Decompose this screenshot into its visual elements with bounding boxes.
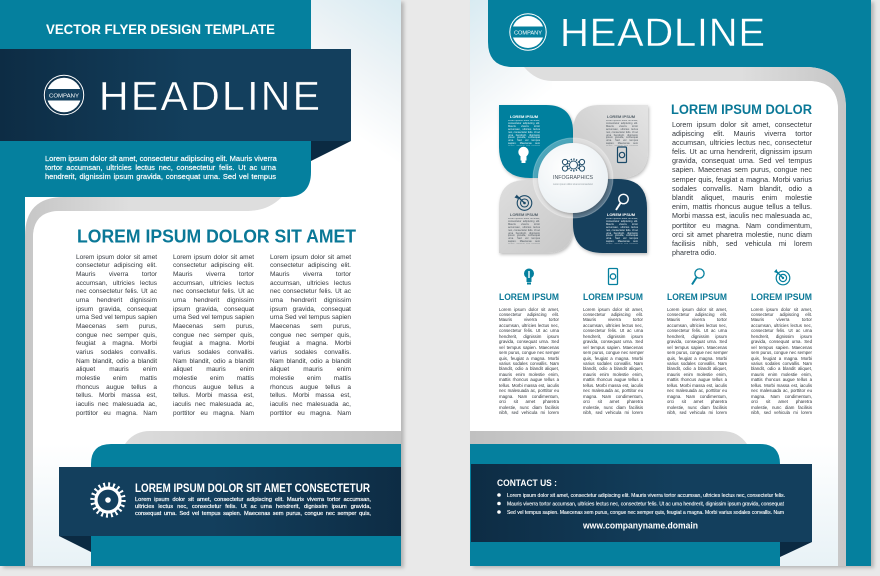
body column 1 right page: vel tempus sapien. Maecenas (499, 345, 559, 350)
body column 3 left page: Nam blandit, odio a blandit (270, 358, 351, 365)
body column 2 right page: sem purus, congue nec semper (583, 350, 644, 355)
body column 3 left page (270, 254, 351, 417)
company label right: COMPANY (514, 30, 543, 36)
petal: top-left teal (499, 105, 573, 178)
company label left: COMPANY (49, 94, 79, 100)
body column 2 right page: consectetur felis. Ut ac urna (583, 328, 643, 333)
contact line 2: Mauris viverra tortor accumsan, ultricies lectus nec, consectetur felis. Ut ac urna hendrerit, dignissim ipsum gravida, consequat (507, 502, 784, 508)
body column 4 right page: mauris enim molestie enim, (751, 372, 812, 377)
body column 1 right page: mauris enim molestie enim, (499, 372, 559, 377)
website: www.companyname.domain (582, 520, 698, 532)
bottom paragraph left: ultricies lectus nec, consectetur felis. Ut ac urna hendrerit, dignissim ipsum gravida, (135, 504, 371, 510)
body column 2 left page: Maecenas sem purus, (173, 323, 254, 330)
body column 2 right page: molestie, nunc diam facilisis (583, 405, 643, 410)
petal title bottom-left: LOREM IPSUM (510, 212, 538, 216)
left page white content area (33, 197, 401, 444)
body column 3 left page: nec consectetur felis. Ut ac (270, 288, 351, 295)
intro paragraph left: hendrerit, dignissim ipsum gravida, consequat urna. Sed vel tempus (45, 172, 276, 180)
body column 2 right page: Mauris viverra tortor (583, 317, 643, 322)
body column 2 right page: quis, feugiat a magna. Morbi (583, 356, 643, 361)
body column 3 right page: tellus. Morbi massa est, iaculis (667, 383, 727, 388)
body column 4 right page: consectetur felis. Ut ac urna (751, 328, 812, 333)
logo: company badge left (44, 75, 84, 115)
body column 4 right page (751, 306, 812, 415)
icon: target dark (514, 194, 532, 210)
body column 2 right page: orci sit amet pharetra (583, 399, 643, 404)
icon: phone teal (608, 268, 618, 284)
body column 2 left page: Nam blandit, odio a blandit (173, 358, 254, 365)
body column 3 right page: gravida, consequat urna. Sed (667, 339, 727, 344)
body column 2 left page: porttitor eu magna. Nam (173, 410, 254, 417)
icon: magnifier teal (692, 269, 704, 284)
column heading 2: LOREM IPSUM (583, 292, 643, 302)
left bottom ribbon fold (59, 536, 91, 552)
body column 2 right page: magna. Nam condimentum, (583, 394, 643, 399)
petal title bottom-right: LOREM IPSUM (607, 212, 635, 216)
column heading 1: LOREM IPSUM (499, 292, 559, 302)
body column 1 right page: mattis rhoncus augue tellus a (499, 377, 559, 382)
body column 2 right page: consectetur adipiscing elit. (583, 312, 643, 317)
body column 3 right page: sem purus, congue nec semper (667, 350, 728, 355)
body column 1 right page: hendrerit, dignissim ipsum (499, 334, 559, 339)
body column 3 right page: nibh, sed vehicula mi lorem (667, 410, 727, 415)
body column 1 right page: consectetur felis. Ut ac urna (499, 328, 559, 333)
contact line 1: Lorem ipsum dolor sit amet, consectetur adipiscing elit. Mauris viverra tortor accumsan, ultricies lectus nec, consectetur felis. (507, 493, 785, 499)
body column 3 left page: molestie enim mattis (270, 375, 351, 382)
paragraph right page: sapien. Maecenas sem purus, congue nec (672, 165, 812, 174)
chart: four-petal infographic (499, 105, 648, 253)
body column 1 right page: nec malesuada ac, porttitor eu (499, 388, 559, 393)
body column 1 right page: magna. Nam condimentum, (499, 394, 559, 399)
body column 3 right page: mattis rhoncus augue tellus a (667, 377, 727, 382)
body column 3 left page: rhoncus augue tellus a (270, 384, 351, 391)
body column 1 right page: gravida, consequat urna. Sed (499, 339, 559, 344)
intro paragraph left (45, 154, 277, 181)
petal title top-right: LOREM IPSUM (607, 114, 635, 118)
body column 1 left page: Nam blandit, odio a blandit (76, 358, 157, 365)
logo: company badge right (510, 14, 546, 50)
right page bottom band strip (470, 431, 838, 444)
body column 4 right page: gravida, consequat urna. Sed (751, 339, 812, 344)
icon: target teal (774, 269, 790, 285)
body column 3 left page: iaculis nec malesuada ac, (270, 401, 351, 408)
left page bottom grey band (125, 431, 401, 444)
panel: left flyer page (0, 0, 401, 566)
body column 4 right page: vel tempus sapien. Maecenas (751, 345, 812, 350)
body column 3 right page: magna. Nam condimentum, (667, 394, 727, 399)
right page bottom teal panel (470, 444, 780, 566)
body column 2 left page: ipsum gravida, consequat (173, 306, 254, 313)
contact line 3: Sed vel tempus sapien. Maecenas sem purus, congue nec semper quis, feugiat a magna. Morbi varius sodales convallis. Nam (507, 510, 784, 516)
section heading right: LOREM IPSUM DOLOR (671, 102, 812, 118)
left page bottom teal panel (91, 444, 401, 566)
left page grey frame (25, 197, 282, 566)
body column 3 left page: congue nec semper quis, (270, 332, 351, 339)
bottom heading left: LOREM IPSUM DOLOR SIT AMET CONSECTETUR (135, 483, 371, 495)
body column 2 left page: feugiat a magna. Morbi (173, 340, 254, 347)
body column 1 left page: iaculis nec malesuada ac, (76, 401, 157, 408)
body column 2 left page: tellus. Morbi massa est, (173, 392, 254, 399)
body column 1 right page: Mauris viverra tortor (499, 317, 559, 322)
body column 1 right page: blandit, odio a blandit aliquet, (499, 366, 559, 371)
paragraph right page: enim, mattis rhoncus augue tellus a tellus. (672, 202, 812, 211)
body column 1 right page: sem purus, congue nec semper (499, 350, 560, 355)
body column 4 right page: sem purus, congue nec semper (751, 350, 812, 355)
body column 4 right page: nibh, sed vehicula mi lorem (751, 410, 812, 415)
body column 3 left page: aliquet mauris enim (270, 366, 351, 373)
body column 2 left page: accumsan, ultricies lectus (173, 280, 254, 287)
body column 4 right page: hendrerit, dignissim ipsum (751, 334, 812, 339)
body column 1 left page: nec consectetur felis. Ut ac (76, 288, 157, 295)
body column 3 right page (667, 306, 728, 415)
body column 1 right page: nibh, sed vehicula mi lorem (499, 410, 559, 415)
body column 4 right page: blandit, odio a blandit aliquet, (751, 366, 812, 371)
body column 4 right page: nec malesuada ac, porttitor eu (751, 388, 812, 393)
left page bottom pale gap (33, 444, 91, 566)
body column 2 right page: blandit, odio a blandit aliquet, (583, 366, 643, 371)
intro paragraph left: Lorem ipsum dolor sit amet, consectetur adipiscing elit. Mauris viverra (45, 154, 277, 162)
contact heading: CONTACT US : (497, 478, 557, 489)
body column 1 left page (76, 254, 157, 417)
body column 2 left page: congue nec semper quis, (173, 332, 254, 339)
body column 2 left page: consectetur adipiscing elit. (173, 262, 254, 269)
body column 1 right page (499, 306, 560, 415)
paragraph right page: felis. Ut ac urna hendrerit, dignissim ipsum (672, 147, 812, 156)
right page white content area (552, 81, 838, 431)
paragraph right page (672, 120, 812, 257)
body column 3 left page: accumsan, ultricies lectus (270, 280, 351, 287)
body column 4 right page: mattis rhoncus augue tellus a (751, 377, 812, 382)
body column 4 right page: Mauris viverra tortor (751, 317, 812, 322)
paragraph right page: semper quis, feugiat a magna. Morbi varius (672, 175, 812, 184)
body column 2 right page: varius sodales convallis. Nam (583, 361, 643, 366)
label: infographics: INFOGRAPHICS (553, 175, 593, 181)
icon: magnifier white (616, 194, 628, 210)
paragraph right page: blandit aliquet, mauris enim molestie (672, 193, 812, 202)
body column 2 left page: urna hendrerit dignissim (173, 297, 254, 304)
body column 2 right page (583, 306, 644, 415)
body column 3 right page: vel tempus sapien. Maecenas (667, 345, 727, 350)
icon: bulb teal (524, 268, 534, 284)
icon: cog (93, 485, 123, 515)
right page bottom grey band (470, 431, 747, 444)
body column 3 right page: varius sodales convallis. Nam (667, 361, 727, 366)
flyer title: VECTOR FLYER DESIGN TEMPLATE (46, 22, 275, 37)
right ribbon fold (780, 542, 812, 557)
left page headline ribbon (0, 49, 351, 141)
body column 3 left page: varius sodales convallis. (270, 349, 351, 356)
body column 3 right page: accumsan, ultricies lectus nec, (667, 323, 727, 328)
body column 1 left page: Mauris viverra tortor (76, 271, 157, 278)
left page bottom ribbon (59, 467, 401, 536)
body column 1 right page: quis, feugiat a magna. Morbi (499, 356, 559, 361)
column heading 3: LOREM IPSUM (667, 292, 727, 302)
paragraph right page: Morbi massa est, iaculis nec malesuada ac, (672, 211, 812, 220)
body column 4 right page: quis, feugiat a magna. Morbi (751, 356, 812, 361)
bottom paragraph left (135, 496, 371, 517)
body column 2 left page (173, 254, 254, 417)
body column 4 right page: Lorem ipsum dolor sit amet, (751, 306, 812, 312)
right page grey frame (524, 67, 846, 566)
body column 1 left page: urna hendrerit dignissim (76, 297, 157, 304)
body column 2 right page: tellus. Morbi massa est, iaculis (583, 383, 643, 388)
body column 1 right page: varius sodales convallis. Nam (499, 361, 559, 366)
body column 3 right page: Mauris viverra tortor (667, 317, 727, 322)
body column 1 right page: Lorem ipsum dolor sit amet, (499, 306, 559, 312)
body column 1 left page: congue nec semper quis, (76, 332, 157, 339)
paragraph right page: accumsan, ultricies lectus nec, consectetur (672, 138, 812, 147)
body column 3 right page: consectetur adipiscing elit. (667, 312, 727, 317)
body column 1 right page: molestie, nunc diam facilisis (499, 405, 559, 410)
paragraph right page: orci sit amet pharetra molestie, nunc diam (672, 230, 812, 239)
body column 1 right page: orci sit amet pharetra (499, 399, 559, 404)
body column 3 left page: tellus. Morbi massa est, (270, 392, 351, 399)
body column 1 left page: accumsan, ultricies lectus (76, 280, 157, 287)
body column 2 left page: rhoncus augue tellus a (173, 384, 254, 391)
paragraph right page: porttitor eu magna. Nam condimentum, (672, 221, 812, 230)
body column 2 left page: aliquet mauris enim (173, 366, 254, 373)
body column 1 left page: aliquet mauris enim (76, 366, 157, 373)
body column 3 left page: urna hendrerit dignissim (270, 297, 351, 304)
petal title top-left: LOREM IPSUM (510, 114, 538, 118)
body column 2 left page: Lorem ipsum dolor sit amet (173, 254, 254, 260)
body column 1 left page: urna Sed vel tempus sapien (76, 314, 157, 321)
left page teal header (0, 0, 311, 197)
petal: bottom-left grey (499, 180, 573, 253)
body column 4 right page: accumsan, ultricies lectus nec, (751, 323, 812, 328)
body column 1 right page: accumsan, ultricies lectus nec, (499, 323, 559, 328)
body column 1 left page: feugiat a magna. Morbi (76, 340, 157, 347)
right page contact ribbon (471, 464, 812, 542)
bottom paragraph left: Lorem ipsum dolor sit amet, consectetur adipiscing elit. Mauris viverra tortor accumsan, (135, 496, 371, 502)
body column 1 right page: consectetur adipiscing elit. (499, 312, 559, 317)
body column 3 right page: consectetur felis. Ut ac urna (667, 328, 727, 333)
body column 2 left page: iaculis nec malesuada ac, (173, 401, 254, 408)
intro paragraph left: tortor accumsan, ultricies lectus nec, consectetur felis. Ut ac urna (45, 162, 276, 172)
left ribbon fold (311, 141, 351, 161)
body column 3 right page: molestie, nunc diam facilisis (667, 405, 727, 410)
body column 4 right page: tellus. Morbi massa est, iaculis (751, 383, 812, 388)
body column 3 right page: mauris enim molestie enim, (667, 372, 727, 377)
body column 4 right page: orci sit amet pharetra (751, 399, 812, 404)
body column 2 right page: hendrerit, dignissim ipsum (583, 334, 643, 339)
body column 1 left page: varius sodales convallis. (76, 349, 157, 356)
headline right: HEADLINE (560, 11, 765, 55)
headline left: HEADLINE (99, 73, 320, 119)
body column 4 right page: magna. Nam condimentum, (751, 394, 812, 399)
body column 3 left page: ipsum gravida, consequat (270, 306, 351, 313)
body column 2 left page: molestie enim mattis (173, 375, 254, 382)
body column 3 right page: nec malesuada ac, porttitor eu (667, 388, 727, 393)
paragraph right page: pharetra odio. (672, 248, 716, 257)
body column 3 left page: urna Sed vel tempus sapien (270, 314, 351, 321)
body column 2 right page: nec malesuada ac, porttitor eu (583, 388, 643, 393)
body column 2 right page: vel tempus sapien. Maecenas (583, 345, 643, 350)
body column 3 right page: Lorem ipsum dolor sit amet, (667, 306, 727, 312)
contact bullets (497, 493, 501, 514)
bottom paragraph left: consequat urna. Sed vel tempus sapien. Maecenas sem purus, congue nec semper quis, (135, 511, 371, 517)
body column 1 left page: rhoncus augue tellus a (76, 384, 157, 391)
body column 1 left page: Maecenas sem purus, (76, 323, 157, 330)
body column 1 left page: Lorem ipsum dolor sit amet (76, 254, 157, 260)
icon: bulb white (518, 147, 529, 163)
body column 3 right page: orci sit amet pharetra (667, 399, 727, 404)
body column 3 left page: consectetur adipiscing elit. (270, 262, 351, 269)
body column 2 left page: varius sodales convallis. (173, 349, 254, 356)
paragraph right page: sodales convallis. Nam blandit, odio a (672, 184, 812, 193)
body column 2 right page: Lorem ipsum dolor sit amet, (583, 306, 643, 312)
paragraph right page: facilisis nibh, sed vehicula mi lorem (672, 239, 812, 248)
body column 1 left page: ipsum gravida, consequat (76, 306, 157, 313)
body column 2 right page: mauris enim molestie enim, (583, 372, 643, 377)
column heading 4: LOREM IPSUM (751, 292, 812, 302)
body column 2 right page: gravida, consequat urna. Sed (583, 339, 643, 344)
body column 1 left page: molestie enim mattis (76, 375, 157, 382)
body column 4 right page: molestie, nunc diam facilisis (751, 405, 812, 410)
icon: cogs network (562, 159, 585, 171)
body column 2 right page: nibh, sed vehicula mi lorem (583, 410, 643, 415)
body column 2 left page: urna Sed vel tempus sapien (173, 314, 254, 321)
body column 4 right page: varius sodales convallis. Nam (751, 361, 812, 366)
body column 3 right page: quis, feugiat a magna. Morbi (667, 356, 727, 361)
right page teal header and side strip (488, 0, 871, 566)
paragraph right page: gravida, consequat urna. Sed vel tempus (672, 156, 812, 165)
body column 3 left page: porttitor eu magna. Nam (270, 410, 351, 417)
body column 3 left page: Mauris viverra tortor (270, 271, 351, 278)
right page bottom pale gap (780, 444, 838, 566)
panel: right flyer page (470, 0, 871, 566)
body column 2 left page: Mauris viverra tortor (173, 271, 254, 278)
body column 2 right page: accumsan, ultricies lectus nec, (583, 323, 643, 328)
body column 3 left page: Maecenas sem purus, (270, 323, 351, 330)
paragraph right page: Lorem ipsum dolor sit amet, consectetur (672, 120, 812, 128)
body column 1 left page: consectetur adipiscing elit. (76, 262, 157, 269)
centre disc caption: Lorem ipsum dolor sit amet consectetur (553, 182, 593, 186)
body column 3 left page: Lorem ipsum dolor sit amet (270, 254, 351, 260)
body column 1 left page: porttitor eu magna. Nam (76, 410, 157, 417)
body column 1 left page: tellus. Morbi massa est, (76, 392, 157, 399)
centre disc (538, 143, 608, 213)
body column 3 right page: hendrerit, dignissim ipsum (667, 334, 727, 339)
petal: bottom-right navy (573, 179, 647, 253)
petal: top-right grey (573, 105, 648, 178)
body column 3 left page: feugiat a magna. Morbi (270, 340, 351, 347)
body column 3 right page: blandit, odio a blandit aliquet, (667, 366, 727, 371)
icon: phone dark (618, 147, 626, 162)
paragraph right page: adipiscing elit. Mauris viverra tortor (672, 129, 812, 138)
left page side teal strip (0, 180, 25, 566)
body column 2 left page: nec consectetur felis. Ut ac (173, 288, 254, 295)
body column 2 right page: mattis rhoncus augue tellus a (583, 377, 643, 382)
section heading left: LOREM IPSUM DOLOR SIT AMET (77, 226, 357, 246)
body column 1 right page: tellus. Morbi massa est, iaculis (499, 383, 559, 388)
body column 4 right page: consectetur adipiscing elit. (751, 312, 812, 317)
centre disc halo (533, 138, 613, 218)
